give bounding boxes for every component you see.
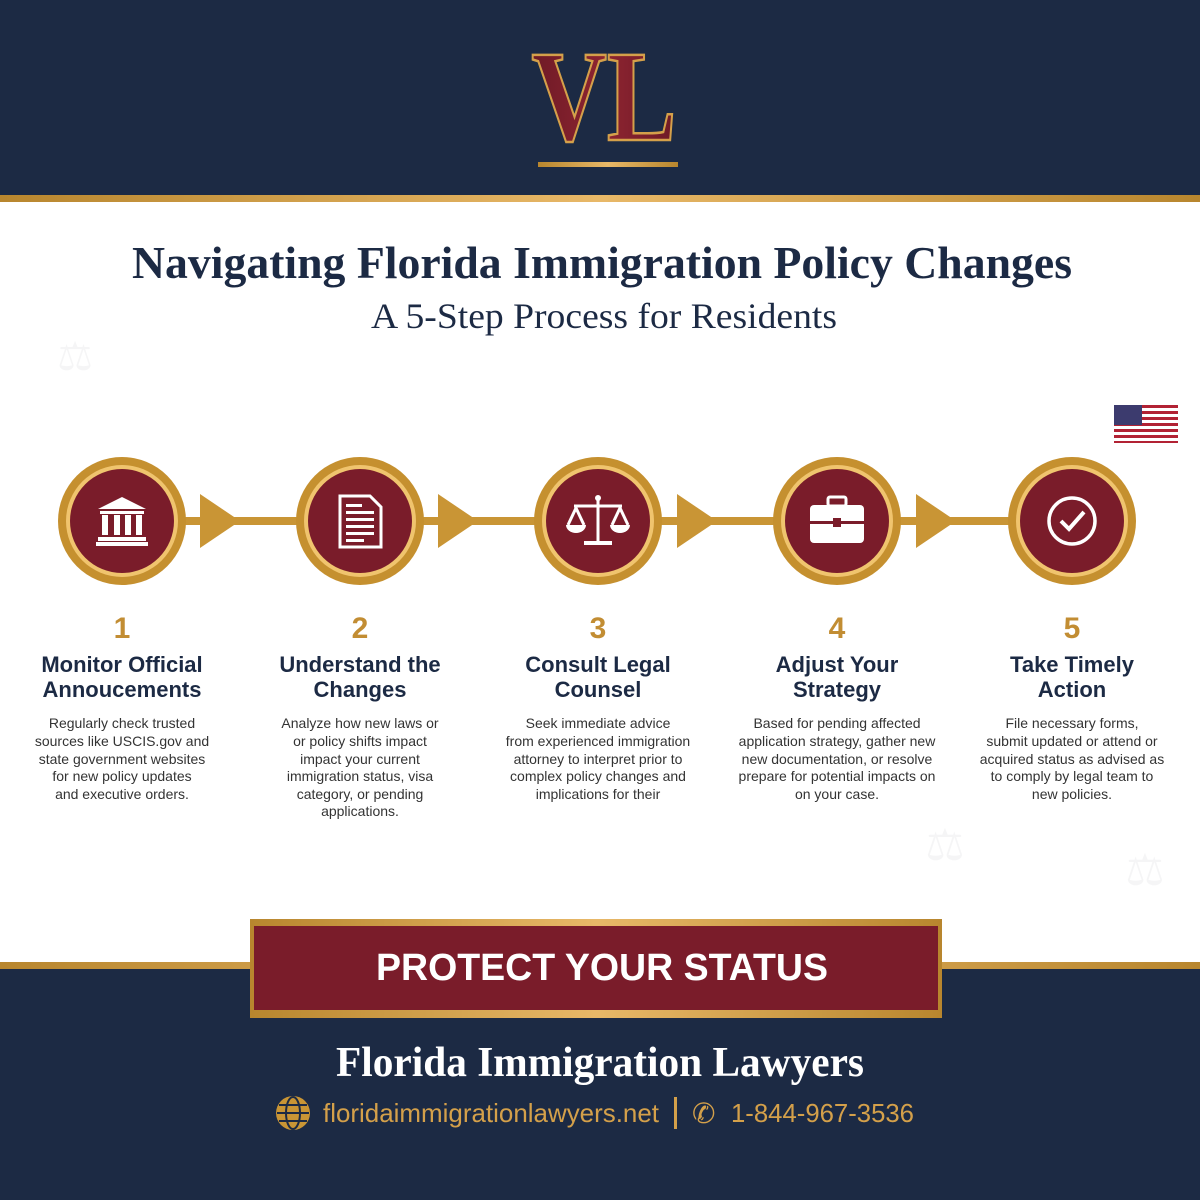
- step 4 circle: briefcase: [773, 457, 901, 585]
- step 5 text: File necessary forms,: [1005, 715, 1139, 731]
- logo VL: VL: [532, 25, 676, 169]
- step 4 text: application strategy, gather new: [739, 733, 936, 749]
- banner: protect your status: PROTECT YOUR STATUS: [376, 947, 828, 989]
- step 2 circle: document: [296, 457, 424, 585]
- step 5 text: submit updated or attend or: [986, 733, 1158, 749]
- step 3 text: implications for their: [536, 786, 661, 802]
- contact line: floridaimmigrationlawyers.net: [323, 1098, 660, 1128]
- step 5 text: acquired status as advised as: [980, 751, 1164, 767]
- step 5 text: 5: [1064, 612, 1080, 645]
- step 3 text: 3: [590, 612, 606, 645]
- step 3 text: attorney to interpret prior to: [514, 751, 683, 767]
- step 3 text: Consult Legal: [525, 652, 671, 677]
- step 5 text: to comply by legal team to: [991, 768, 1154, 784]
- step 1 text: 1: [114, 612, 130, 645]
- step 2 text: immigration status, visa: [287, 768, 433, 784]
- step 4 text: new documentation, or resolve: [742, 751, 933, 767]
- step 5 text: [980, 612, 1164, 802]
- step 2 text: [279, 612, 441, 819]
- step 3 text: from experienced immigration: [506, 733, 690, 749]
- step 1 text: for new policy updates: [52, 768, 192, 784]
- step 1 text: Annoucements: [43, 677, 201, 702]
- step 1 circle: building: [58, 457, 186, 585]
- step 1 text: [35, 612, 209, 802]
- icon: US flag: [1114, 405, 1178, 443]
- header band: [0, 0, 1200, 202]
- subtitle: A 5-Step Process for Residents: [371, 296, 837, 336]
- step 4 text: prepare for potential impacts on: [739, 768, 935, 784]
- step 2 text: Understand the: [279, 652, 441, 677]
- decorative faded icons: ⚖: [925, 821, 965, 870]
- contact line: ✆: [692, 1098, 715, 1129]
- step 2 text: impact your current: [300, 751, 420, 767]
- step 2 text: Changes: [314, 677, 406, 702]
- step 2 text: applications.: [321, 803, 399, 819]
- process timeline connector: [150, 494, 1050, 548]
- decorative faded icons: ⚖: [1125, 846, 1165, 895]
- step 1 text: and executive orders.: [55, 786, 189, 802]
- step 2 text: Analyze how new laws or: [281, 715, 439, 731]
- step 3 text: [506, 612, 690, 802]
- step 2 text: or policy shifts impact: [293, 733, 427, 749]
- banner: protect your status: [250, 919, 942, 1018]
- step 2 text: category, or pending: [297, 786, 423, 802]
- decorative faded icons: [55, 335, 1165, 895]
- step 1 text: state government websites: [39, 751, 205, 767]
- step 3 circle: scales: [534, 457, 662, 585]
- step 4 text: on your case.: [795, 786, 879, 802]
- step 1 text: sources like USCIS.gov and: [35, 733, 209, 749]
- step 5 text: Take Timely: [1010, 652, 1135, 677]
- step 3 text: complex policy changes and: [510, 768, 686, 784]
- step 4 text: Strategy: [793, 677, 882, 702]
- step 3 text: Seek immediate advice: [526, 715, 671, 731]
- step 5 text: Action: [1038, 677, 1106, 702]
- step 4 text: 4: [829, 612, 846, 645]
- title: Navigating Florida Immigration Policy Changes: [132, 237, 1072, 288]
- firm name: Florida Immigration Lawyers: [336, 1040, 864, 1086]
- step 4 text: Based for pending affected: [753, 715, 921, 731]
- decorative faded icons: ⚖: [57, 335, 93, 379]
- step 1 text: Regularly check trusted: [49, 715, 195, 731]
- step 1 text: Monitor Official: [41, 652, 203, 677]
- step 5 text: new policies.: [1032, 786, 1112, 802]
- contact line: [276, 1096, 914, 1130]
- step 4 text: Adjust Your: [776, 652, 899, 677]
- step 2 text: 2: [352, 612, 368, 645]
- step 4 text: [739, 612, 936, 802]
- contact line: 1-844-967-3536: [731, 1098, 914, 1128]
- footer band: [0, 962, 1200, 1200]
- step 3 text: Counsel: [555, 677, 641, 702]
- step 5 circle: check: [1008, 457, 1136, 585]
